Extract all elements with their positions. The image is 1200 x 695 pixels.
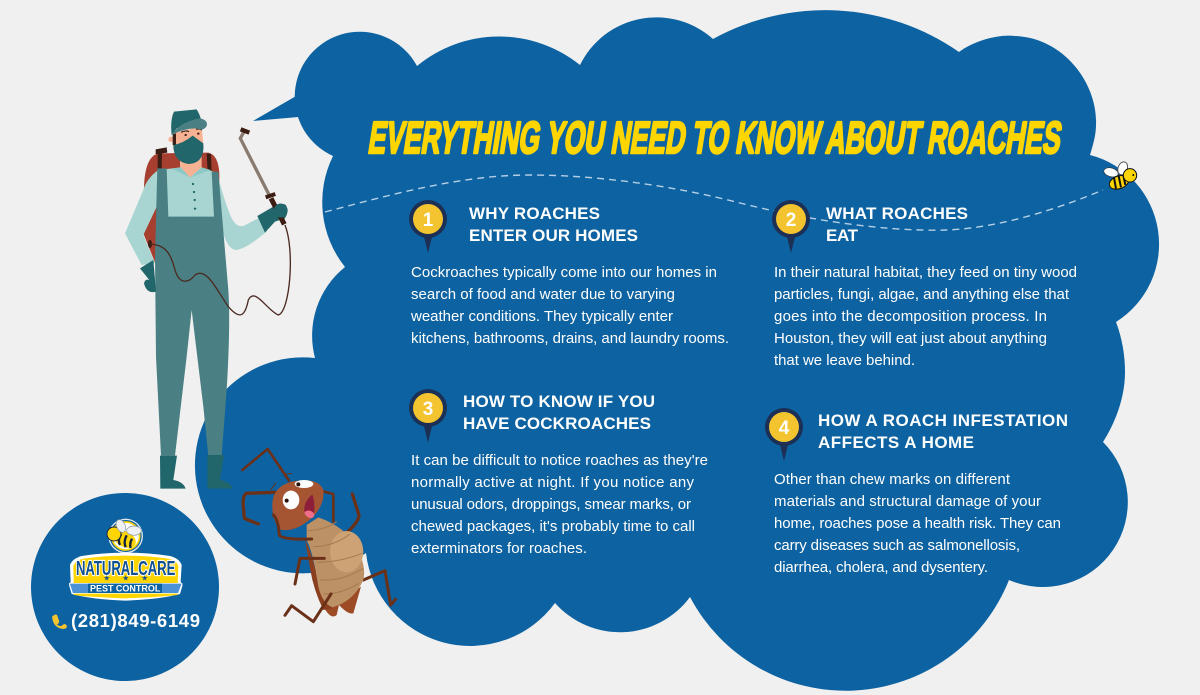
overalls [155,168,229,456]
icon: exterminator with sprayer [125,109,290,489]
body 2: particles, fungi, algae, and anything else that [774,286,1070,303]
body 4: Other than chew marks on different [774,471,1011,488]
eyes [283,491,299,509]
pin 2 [772,200,810,253]
body 3: It can be difficult to notice roaches as they're [411,452,708,469]
hat [171,109,201,135]
logo ribbon [69,583,182,593]
logo badge circle [31,493,219,681]
body 2: In their natural habitat, they feed on tiny wood [774,264,1077,281]
body 4: materials and structural damage of your [774,493,1041,510]
heading 3: HOW TO KNOW IF YOU [463,392,655,411]
head [168,109,207,164]
section 3 [409,389,708,557]
phone icon [52,614,67,629]
shirt [125,170,158,265]
section 4 [765,408,1068,576]
body 3: chewed packages, it's probably time to call [411,518,695,535]
body 4: home, roaches pose a health risk. They can [774,515,1061,532]
pin 3 [409,389,447,443]
wings [320,587,361,617]
shirt buttons [192,183,196,210]
body 1: kitchens, bathrooms, drains, and laundry rooms. [411,330,729,347]
abdomen [307,517,364,607]
pin 1 [409,200,447,253]
heading 1: ENTER OUR HOMES [469,226,638,245]
backpack [143,153,219,267]
speech cloud background [195,10,1159,691]
body 3: unusual odors, droppings, smear marks, or [411,496,691,513]
logo shield [69,553,183,601]
boots [160,455,233,489]
body 1: search of food and water due to varying [411,286,675,303]
logo: Natural Care Pest Control [69,518,183,601]
pin 3: 3 [423,399,433,420]
upper body rear [143,147,219,267]
icon: panicked cockroach [242,449,396,622]
body 1: Cockroaches typically come into our homes in [411,264,717,281]
logo stars: ★ [141,573,148,582]
gloves [140,260,156,292]
section 2 [772,200,1077,369]
pin 2: 2 [786,210,796,231]
body 3: normally active at night. If you notice any [411,474,694,491]
flight path dashed line [325,175,1103,230]
logo tagline: PEST CONTROL [90,584,161,594]
pin 4: 4 [779,418,790,439]
sprayer wand [240,132,270,197]
pin 4 [765,408,803,461]
bee icon [1103,160,1137,192]
logo stars [103,573,148,582]
body 4: carry diseases such as salmonellosis, [774,537,1020,554]
body 2: that we leave behind. [774,352,915,369]
heading 1: WHY ROACHES [469,204,600,223]
mouth [304,494,314,518]
neck [180,157,202,177]
body 3: exterminators for roaches. [411,540,587,557]
pin 1: 1 [423,210,434,231]
body 2: Houston, they will eat just about anything [774,330,1047,347]
heading 2: WHAT ROACHES [826,204,968,223]
logo name: NATURALCARE [76,558,175,580]
logo stars: ★ [122,573,129,582]
heading 3: HAVE COCKROACHES [463,414,651,433]
head [272,480,324,530]
body 4: diarrhea, cholera, and dysentery. [774,559,988,576]
heading 4: AFFECTS A HOME [818,433,974,452]
logo stars: ★ [103,573,110,582]
logo bee [107,518,142,553]
hose [148,240,152,248]
section 1 [409,200,729,347]
body 2: goes into the decomposition process. In [774,308,1047,325]
face mask [173,136,203,164]
body 1: weather conditions. They typically enter [410,308,673,325]
phone number: (281)849-6149 [71,610,200,631]
front limbs [273,515,331,622]
rear limbs and antennae [242,449,396,605]
heading 4: HOW A ROACH INFESTATION [818,411,1068,430]
heading 2: EAT [826,226,859,245]
